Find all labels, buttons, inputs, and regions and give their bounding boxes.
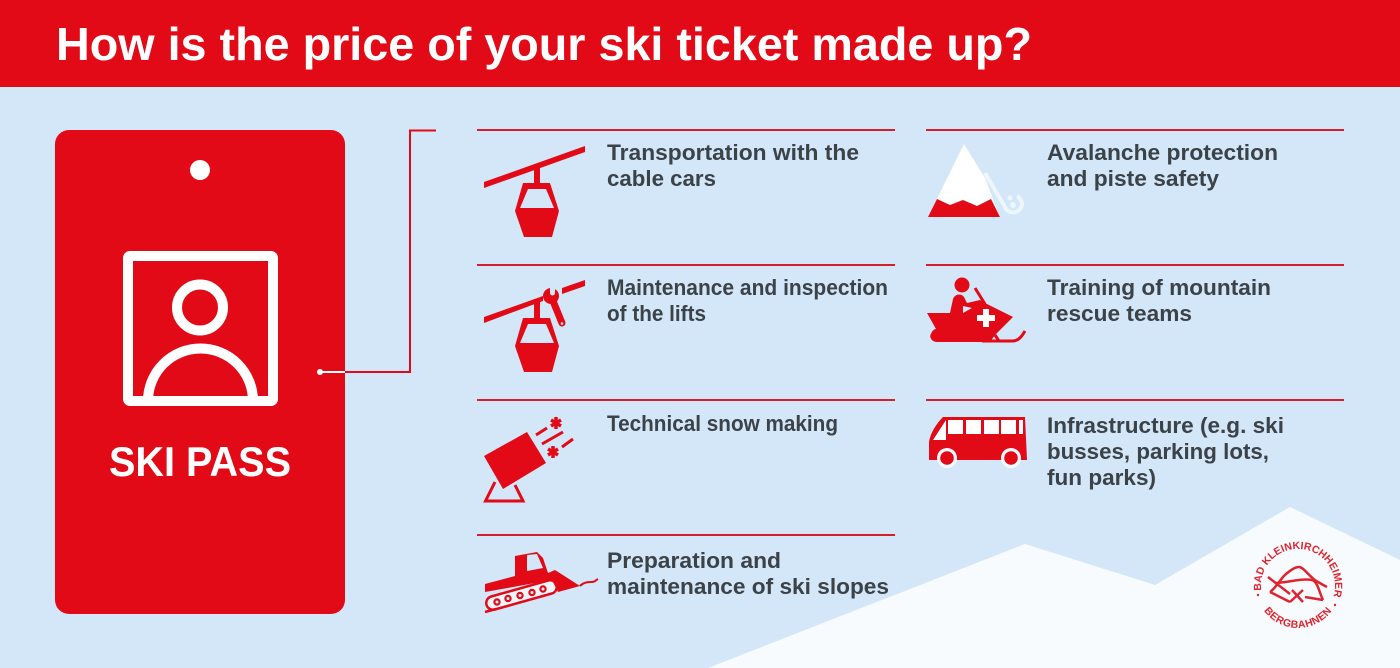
card label: SKI PASS [109, 438, 291, 485]
text: fun parks) [1047, 465, 1156, 490]
text [1047, 413, 1284, 490]
icon: rescue snowmobile [927, 278, 1025, 342]
connector line [317, 130, 436, 375]
text: Transportation with the [607, 140, 859, 165]
snowy mountain background [708, 507, 1400, 668]
icon: portrait frame [128, 256, 273, 401]
text [607, 140, 859, 191]
text: of the lifts [607, 301, 706, 326]
text: Maintenance and inspection [607, 275, 888, 300]
text: Infrastructure (e.g. ski [1047, 413, 1284, 438]
item: mountain rescue training [927, 275, 1271, 342]
text: Avalanche protection [1047, 140, 1278, 165]
item: infrastructure [929, 413, 1284, 490]
title banner: How is the price of your ski ticket made up? [56, 18, 1032, 70]
icon: snow groomer [485, 552, 598, 612]
text [1047, 140, 1278, 191]
text: busses, parking lots, [1047, 439, 1269, 464]
text: Technical snow making [607, 411, 838, 436]
text [607, 275, 888, 326]
icon: avalanche mountain [928, 144, 1022, 217]
logo: Bad Kleinkirchheimer Bergbahnen: BERGBAHNEN [1264, 606, 1332, 628]
logo: Bad Kleinkirchheimer Bergbahnen: BAD KLEINKIRCHHEIMER [1254, 542, 1342, 598]
item: snow making [484, 411, 838, 501]
text: rescue teams [1047, 301, 1192, 326]
logo: Bad Kleinkirchheimer Bergbahnen [1254, 542, 1342, 628]
text: Preparation and [607, 548, 781, 573]
text: cable cars [607, 166, 716, 191]
text [1047, 275, 1271, 326]
icon: bus [929, 417, 1027, 468]
text: Training of mountain [1047, 275, 1271, 300]
item: ski slope preparation [485, 548, 889, 612]
icon: cable car [484, 146, 585, 237]
text: maintenance of ski slopes [607, 574, 889, 599]
item: avalanche protection [928, 140, 1278, 217]
item: lift maintenance [484, 275, 888, 372]
icon: cable car with wrench [484, 280, 585, 372]
text [607, 548, 889, 599]
text: and piste safety [1047, 166, 1220, 191]
title banner [0, 0, 1400, 87]
item: cable cars [484, 140, 859, 237]
panel: ski pass card [55, 130, 345, 614]
icon: snow cannon [484, 417, 573, 501]
